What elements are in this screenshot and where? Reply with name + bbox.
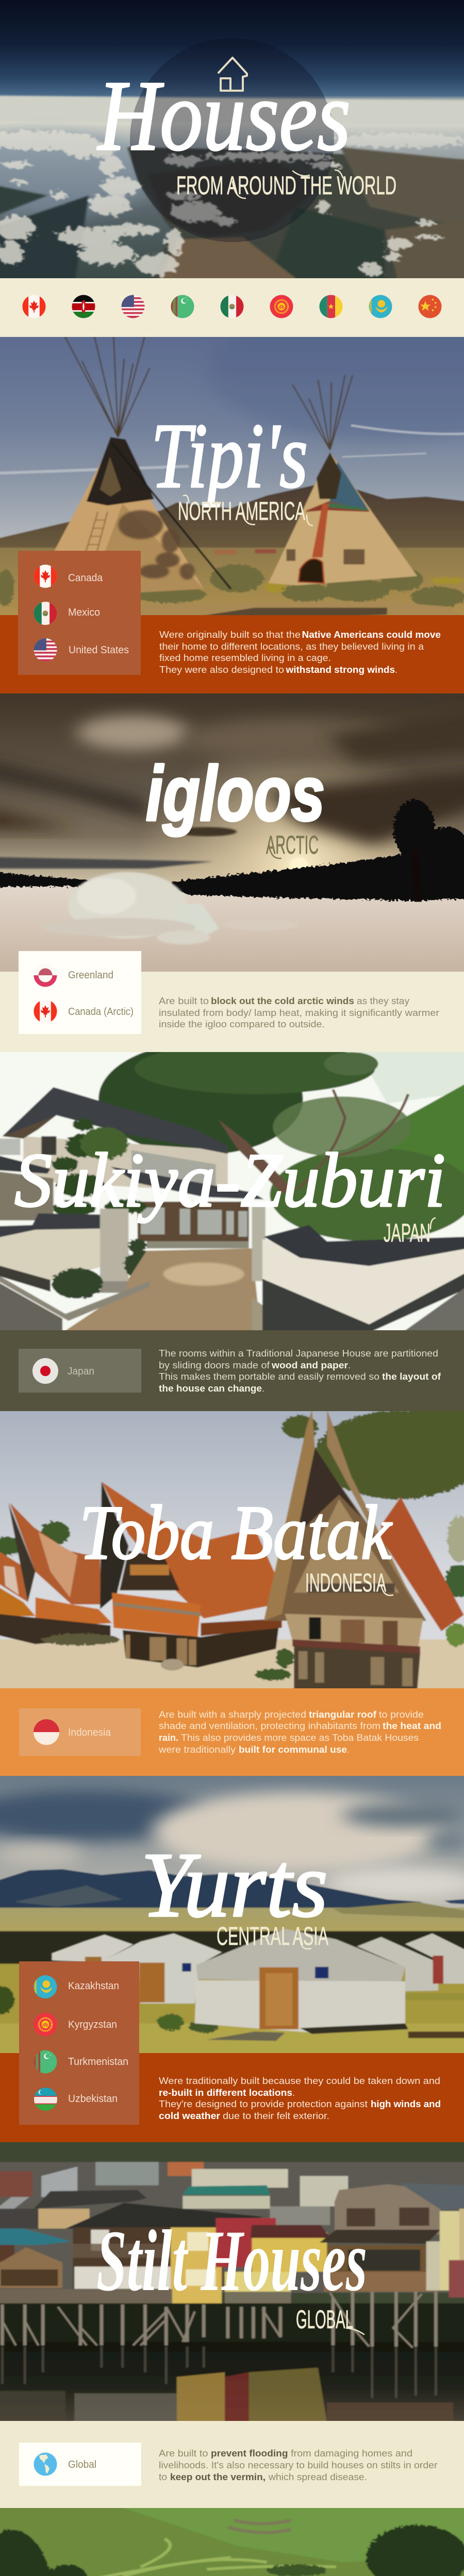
tipi photo	[0, 337, 464, 615]
region subtitle: INDONESIA	[305, 1568, 386, 1597]
right tipi	[292, 375, 353, 450]
icon: Kyrgyzstan flag	[270, 295, 293, 318]
tipi description: Native Americans could move	[302, 630, 441, 640]
sukiya description: by sliding doors made of	[159, 1360, 270, 1370]
icon: Cameroon flag	[320, 295, 342, 318]
region subtitle	[305, 1568, 393, 1597]
icon: Uzbekistan flag	[34, 2088, 57, 2111]
sukiya description: wood and paper	[271, 1360, 348, 1370]
text band	[0, 1688, 464, 1776]
section: stilt houses	[0, 2140, 464, 2508]
icon: USA flag	[122, 295, 144, 318]
sukiya description	[159, 1348, 441, 1394]
icon: Turkmenistan flag	[34, 2050, 57, 2073]
icon: Canada flag	[34, 999, 57, 1023]
country: Uzbekistan: Uzbekistan	[68, 2093, 118, 2105]
icon: Japan flag	[32, 1358, 58, 1384]
country: United States: United States	[69, 645, 129, 656]
region subtitle	[178, 495, 312, 526]
stilt houses photo	[0, 2140, 464, 2423]
icon: Indonesia flag	[34, 1719, 59, 1745]
toba batak description: were traditionally	[158, 1744, 236, 1755]
region subtitle	[296, 2305, 364, 2334]
translucent hero circle	[130, 38, 334, 242]
igloo description: Are built to	[159, 996, 209, 1006]
igloo description: inside the igloo compared to outside.	[159, 1019, 325, 1029]
toba batak photo	[0, 1401, 464, 1691]
toba batak description: triangular roof	[309, 1709, 377, 1720]
yurt description: cold weather	[159, 2111, 220, 2121]
icon: Kenya flag	[72, 295, 95, 318]
toba batak description: This also provides more space as Toba Batak Houses	[181, 1733, 419, 1743]
country panel	[19, 951, 141, 1034]
icon: Canada flag	[23, 295, 45, 318]
stilt houses description: to	[159, 2472, 167, 2482]
text band	[0, 1330, 464, 1411]
yurt description: re-built in different locations	[159, 2088, 292, 2098]
section: igloos	[0, 693, 464, 1052]
flag strip	[0, 278, 464, 337]
toba batak description: to provide	[379, 1709, 424, 1720]
section: yurts	[0, 1774, 464, 2142]
yurt description: due to their felt exterior.	[223, 2111, 329, 2121]
icon: Kyrgyzstan flag	[34, 2013, 57, 2036]
section: toba batak	[0, 1401, 464, 1776]
icon: Kazakhstan flag	[369, 295, 392, 318]
country: Canada (Arctic): Canada (Arctic)	[68, 1006, 134, 1018]
yurt description	[159, 2076, 441, 2121]
tipi description: their home to different locations, as they believed living in a	[159, 641, 424, 652]
tipi description: They were also designed to	[159, 665, 284, 675]
sukiya description: .	[348, 1360, 351, 1370]
igloo description: as they stay	[357, 996, 409, 1006]
title: Toba Batak	[79, 1490, 392, 1575]
text band	[0, 2421, 464, 2508]
sukiya description: the layout of	[382, 1371, 441, 1382]
title: Tipi's	[151, 404, 308, 507]
country: Global: Global	[68, 2459, 96, 2470]
toba batak description: shade and ventilation, protecting inhabitants from	[159, 1721, 380, 1731]
text band	[0, 615, 464, 693]
igloo description: block out the cold arctic winds	[211, 996, 354, 1006]
stilt houses description: prevent flooding	[211, 2448, 288, 2459]
region subtitle	[217, 1922, 328, 1951]
country panel	[18, 551, 141, 675]
country: Canada: Canada	[68, 572, 103, 584]
stilt houses description	[159, 2448, 437, 2482]
icon: Canada flag	[34, 565, 57, 588]
toba batak description: .	[347, 1744, 350, 1755]
yurt description: They're designed to provide protection against	[159, 2099, 368, 2109]
stilt houses description: which spread disease.	[268, 2472, 367, 2482]
region subtitle	[384, 1218, 435, 1247]
icon: USA flag	[34, 638, 57, 662]
igloo photo	[0, 693, 464, 973]
title: Sukiya-Zuburi	[14, 1138, 445, 1223]
main title: Houses	[96, 60, 351, 172]
section: tipis	[0, 300, 464, 693]
toba batak description: Are built with a sharply projected	[159, 1709, 306, 1720]
left tipi	[64, 335, 150, 437]
stilt houses description: from damaging homes and	[291, 2448, 412, 2459]
sukiya description: .	[262, 1383, 264, 1394]
country: Kazakhstan: Kazakhstan	[68, 1980, 119, 1992]
icon: Greenland flag	[34, 963, 57, 987]
text band	[0, 972, 464, 1052]
japanese house photo	[0, 1043, 464, 1332]
country panel	[19, 2443, 141, 2486]
icon: China flag	[419, 295, 441, 318]
sukiya description: This makes them portable and easily removed so	[159, 1371, 379, 1382]
yurt description: Were traditionally built because they could be taken down and	[159, 2076, 440, 2086]
toba batak description: rain.	[159, 1733, 178, 1743]
region subtitle: ARCTIC	[266, 831, 319, 859]
tipi description	[159, 630, 441, 675]
country: Indonesia: Indonesia	[68, 1727, 111, 1738]
yurt description: high winds and	[371, 2099, 441, 2109]
igloo description	[159, 996, 439, 1029]
region subtitle: JAPAN	[384, 1218, 430, 1247]
icon: house outline	[219, 58, 247, 91]
stilt houses description: livelihoods. It's also necessary to build houses on stilts in order	[159, 2460, 437, 2470]
region subtitle: NORTH AMERICA	[178, 497, 305, 526]
icon: Turkmenistan flag	[171, 295, 194, 318]
country: Greenland: Greenland	[68, 970, 113, 981]
country panel	[19, 1349, 141, 1393]
section: hero	[0, 0, 464, 287]
tipi description: .	[395, 665, 397, 675]
igloo description: insulated from body/ lamp heat, making it significantly warmer	[159, 1008, 439, 1018]
sukiya description: the house can change	[159, 1383, 262, 1394]
yurt description: .	[292, 2088, 295, 2098]
region subtitle	[266, 831, 319, 859]
icon: Mexico flag	[221, 295, 243, 318]
country: Mexico: Mexico	[68, 607, 100, 618]
toba batak description: built for communal use	[239, 1744, 347, 1755]
region subtitle: GLOBAL	[296, 2305, 353, 2334]
toba batak description	[158, 1709, 441, 1755]
country: Japan: Japan	[68, 1366, 94, 1377]
title: igloos	[146, 750, 325, 837]
tipi description: withstand strong winds	[285, 665, 395, 675]
icon: globe	[34, 2452, 57, 2476]
country panel	[19, 1961, 139, 2125]
icon: Mexico flag	[34, 602, 57, 625]
tipi description: Were originally built so that the	[159, 630, 301, 640]
yurt photo	[0, 1774, 464, 2057]
country: Kyrgyzstan: Kyrgyzstan	[68, 2019, 117, 2030]
stilt houses description: Are built to	[159, 2448, 208, 2459]
hero photo: earth from high altitude	[0, 0, 464, 287]
region subtitle: CENTRAL ASIA	[217, 1922, 328, 1951]
text band	[0, 2053, 464, 2142]
icon: Kazakhstan flag	[34, 1975, 57, 1998]
section: tulou houses	[0, 2506, 464, 2576]
country: Turkmenistan: Turkmenistan	[68, 2056, 128, 2067]
sukiya description: The rooms within a Traditional Japanese House are partitioned	[159, 1348, 438, 1359]
section: sukiya-zukuri	[0, 1043, 464, 1411]
title: Yurts	[141, 1834, 328, 1936]
stilt houses description: keep out the vermin,	[170, 2472, 266, 2482]
tulou photo	[0, 2506, 464, 2576]
country panel	[19, 1708, 141, 1756]
toba batak description: the heat and	[383, 1721, 441, 1731]
tipi description: fixed home resembled living in a cage.	[159, 653, 331, 663]
